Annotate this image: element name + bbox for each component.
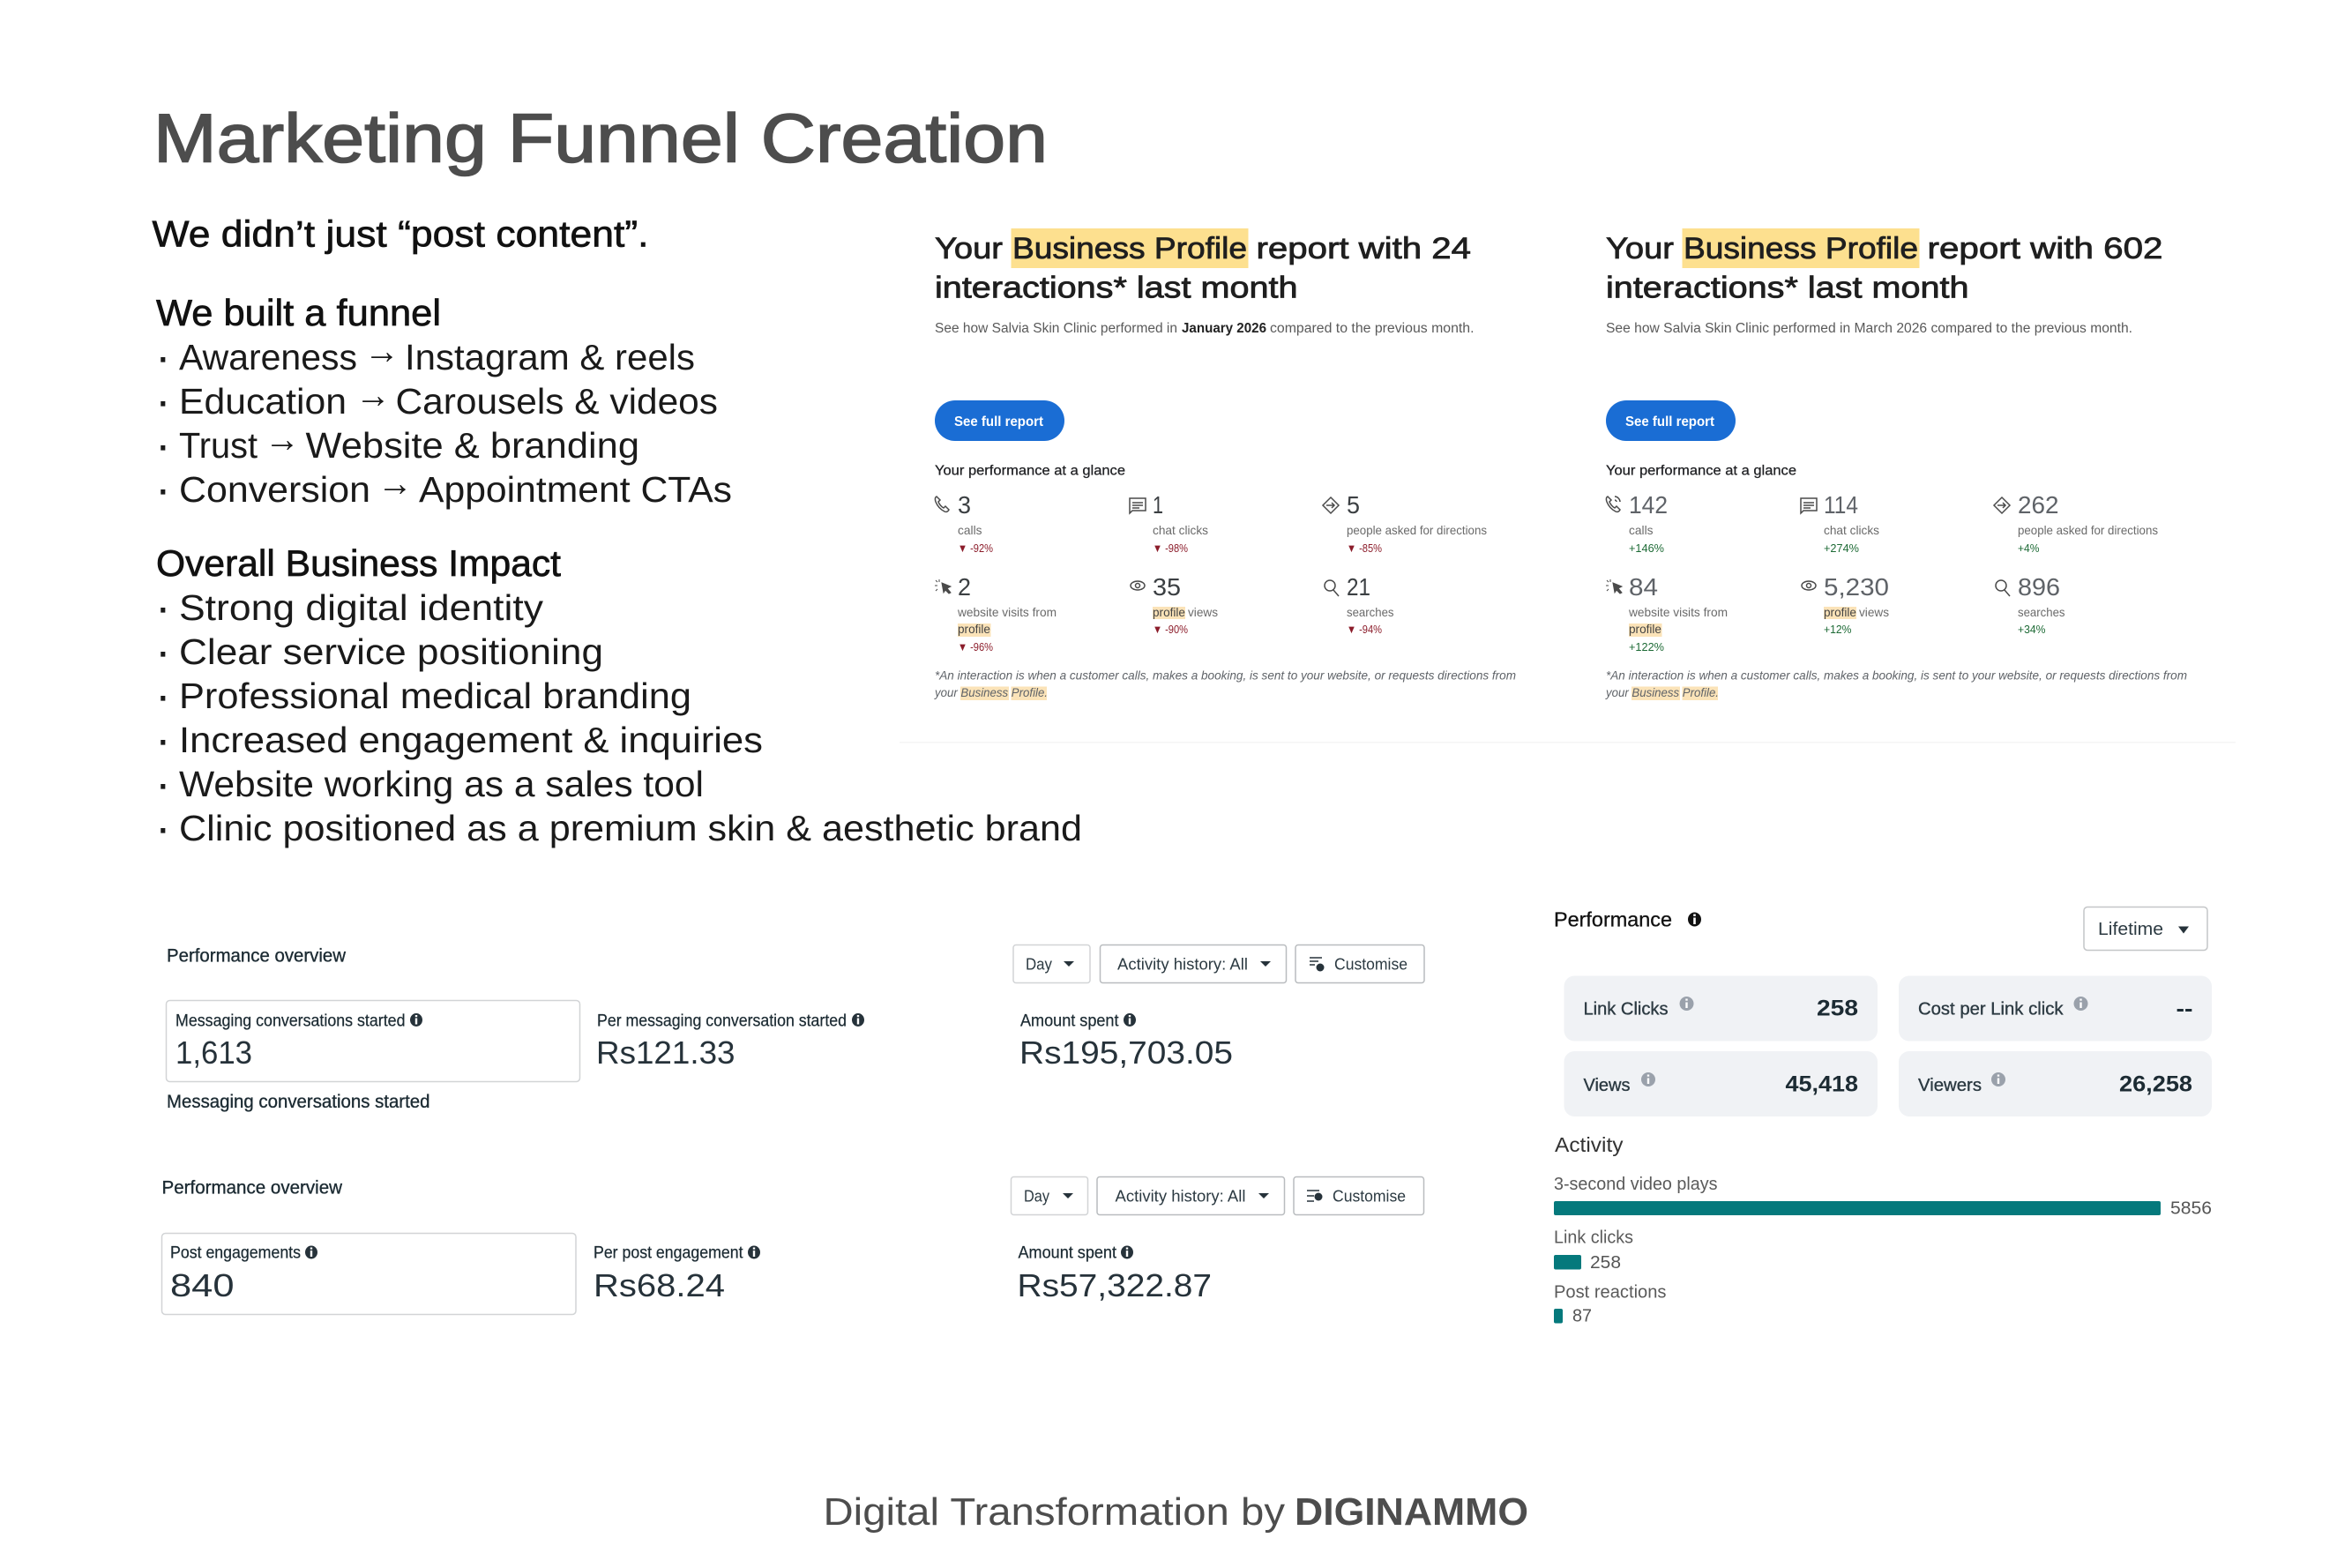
text block: overall business impact: ·: [157, 720, 169, 760]
panel: January Business Profile report: January 2026: [1182, 321, 1266, 336]
panel: January Business Profile report: 35: [1153, 573, 1181, 601]
panel: ad performance cards: --: [2177, 997, 2192, 1021]
text block: funnel list: Appointment CTAs: [419, 469, 732, 510]
text block: funnel list: Awareness: [179, 337, 357, 377]
panel: performance overview post engagement: Post engagements: [170, 1243, 301, 1263]
panel: performance overview messaging: Performance overview: [167, 945, 347, 967]
panel: performance overview messaging: Messaging conversations started: [167, 1092, 430, 1112]
panel: March Business Profile report: 84: [1629, 573, 1658, 601]
panel: March Business Profile report: profile: [1629, 622, 1661, 636]
panel: March Business Profile report: views: [1859, 605, 1889, 619]
text block: overall business impact: Clear service positioning: [179, 631, 603, 672]
panel: March Business Profile report: chat clicks: [1824, 523, 1879, 537]
panel: performance overview post engagement: Performance overview: [162, 1178, 343, 1198]
panel: March Business Profile report: 896: [2018, 573, 2060, 601]
panel: performance overview post engagement: Customise: [1333, 1187, 1406, 1205]
panel: March Business Profile report: +4%: [2018, 541, 2040, 555]
panel: January Business Profile report: 3: [958, 491, 971, 519]
panel: ad performance cards: Cost per Link click: [1918, 1000, 2065, 1019]
panel: January Business Profile report: profile: [1153, 605, 1185, 619]
footer credit: [824, 1490, 1528, 1534]
panel: performance overview messaging: Customise: [1334, 956, 1407, 974]
panel: performance overview post engagement: Rs68.24: [594, 1267, 725, 1303]
panel: January Business Profile report: profile: [958, 622, 990, 636]
panel: March Business Profile report: 114: [1824, 491, 1858, 519]
panel: January Business Profile report: ▼ -94%: [1347, 623, 1382, 636]
panel: ad performance cards: Viewers: [1918, 1076, 1982, 1095]
panel: January Business Profile report: ▼ -85%: [1347, 541, 1382, 555]
panel: ad performance cards: 45,418: [1785, 1072, 1858, 1097]
text block: funnel list: →: [364, 330, 399, 371]
text block: overall business impact: Website working as a sales tool: [179, 764, 704, 804]
panel: January Business Profile report: Business Profile: [1012, 232, 1247, 265]
panel: January Business Profile report: views: [1188, 605, 1218, 619]
panel: January Business Profile report: 21: [1347, 573, 1370, 601]
panel: March Business Profile report: Your performance at a glance: [1606, 464, 1796, 478]
panel: March Business Profile report: 262: [2018, 491, 2058, 519]
panel: January Business Profile report: calls: [958, 523, 982, 537]
text block: overall business impact: ·: [157, 808, 169, 848]
panel: March Business Profile report: *An interaction is when a customer calls, makes a booking, is sent to your website, or requests directions from: [1606, 668, 2187, 683]
panel: performance overview messaging: [166, 945, 1424, 1112]
panel: January Business Profile report: compared to the previous month.: [1270, 321, 1475, 336]
panel: performance overview messaging: Rs195,703.05: [1019, 1034, 1233, 1071]
panel: January Business Profile report: [900, 228, 1570, 743]
text block: funnel list: ·: [157, 425, 169, 466]
panel: performance overview messaging: Amount spent: [1020, 1012, 1119, 1030]
panel: performance overview messaging: 1,613: [175, 1034, 252, 1071]
panel: March Business Profile report: people asked for directions: [2018, 523, 2158, 537]
lead statement: We didn’t just “post content”.: [152, 213, 649, 254]
panel: ad performance cards: Views: [1584, 1076, 1630, 1095]
panel: performance overview messaging: Activity history: All: [1117, 956, 1248, 974]
panel: January Business Profile report: website visits from: [957, 605, 1057, 619]
panel: performance overview messaging: Per messaging conversation started: [597, 1012, 847, 1030]
text block: funnel list: →: [265, 418, 300, 459]
panel: performance overview post engagement: 840: [170, 1267, 235, 1303]
panel: January Business Profile report: 5: [1347, 491, 1360, 519]
panel: March Business Profile report: calls: [1629, 523, 1653, 537]
panel: March Business Profile report: profile: [1824, 605, 1856, 619]
panel: January Business Profile report: people asked for directions: [1347, 523, 1487, 537]
panel: March Business Profile report: Your: [1606, 232, 1674, 265]
text block: funnel list: Carousels & videos: [395, 381, 718, 422]
panel: March Business Profile report: website visits from: [1628, 605, 1728, 619]
panel: March Business Profile report: 142: [1629, 491, 1668, 519]
panel: January Business Profile report: 2: [958, 573, 971, 601]
text block: funnel list: ·: [157, 381, 169, 422]
text block: funnel list: Trust: [179, 425, 258, 466]
panel: performance overview messaging: Rs121.33: [596, 1034, 735, 1071]
panel: January Business Profile report: Your: [935, 232, 1003, 265]
text block: funnel list: →: [355, 374, 391, 415]
panel: ad performance cards: 26,258: [2119, 1072, 2192, 1097]
panel: ad performance cards: Link Clicks: [1584, 1000, 1669, 1019]
footer credit: DIGINAMMO: [1295, 1490, 1528, 1534]
panel: March Business Profile report: +12%: [1824, 623, 1852, 636]
panel: performance overview post engagement: Amount spent: [1018, 1243, 1117, 1263]
text block: overall business impact: ·: [157, 587, 169, 628]
panel: ad performance cards: Lifetime: [2098, 920, 2163, 939]
panel: March Business Profile report: your Business Profile.: [1605, 685, 1719, 699]
panel: March Business Profile report: +34%: [2018, 623, 2046, 636]
panel: March Business Profile report: See how Salvia Skin Clinic performed in March 2026 compared to the previous month.: [1606, 321, 2132, 336]
panel: ad performance cards: Performance: [1554, 908, 1672, 931]
panel: performance overview post engagement: Activity history: All: [1115, 1187, 1245, 1205]
bar chart: activity: 3-second video plays: [1554, 1175, 1718, 1194]
panel: January Business Profile report: ▼ -92%: [958, 541, 993, 555]
panel: January Business Profile report: 1: [1153, 491, 1163, 519]
bar chart: activity: 87: [1572, 1307, 1592, 1326]
panel: January Business Profile report: interactions* last month: [935, 272, 1298, 305]
panel: January Business Profile report: report with 24: [1256, 232, 1471, 265]
panel: January Business Profile report: See full report: [954, 414, 1044, 429]
panel: March Business Profile report: See full report: [1625, 414, 1715, 429]
bar chart: activity: Activity: [1555, 1133, 1624, 1156]
text block: funnel list: Conversion: [179, 469, 370, 510]
footer credit: Digital Transformation by: [824, 1490, 1285, 1534]
text block: funnel list: Instagram & reels: [405, 337, 695, 377]
panel: January Business Profile report: *An interaction is when a customer calls, makes a booking, is sent to your website, or requests directions from: [935, 668, 1516, 683]
panel: performance overview messaging: Messaging conversations started: [175, 1012, 406, 1030]
bar chart: activity: 5856: [2170, 1199, 2212, 1219]
panel: January Business Profile report: your Business Profile.: [934, 685, 1048, 699]
panel: January Business Profile report: searches: [1347, 605, 1393, 619]
panel: performance overview post engagement: Per post engagement: [594, 1243, 743, 1263]
text block: funnel list: ·: [157, 337, 169, 377]
text block: overall business impact: [156, 542, 1082, 848]
text block: funnel list: →: [377, 462, 413, 504]
bar chart: activity: 258: [1590, 1253, 1621, 1273]
panel: March Business Profile report: [1553, 228, 2236, 743]
bar chart: activity: Post reactions: [1554, 1282, 1667, 1302]
panel: performance overview post engagement: Rs57,322.87: [1018, 1267, 1212, 1303]
text block: funnel list: Education: [179, 381, 347, 422]
panel: March Business Profile report: interactions* last month: [1606, 272, 1968, 305]
text block: overall business impact: ·: [157, 764, 169, 804]
panel: January Business Profile report: See how Salvia Skin Clinic performed in: [935, 321, 1177, 336]
panel: January Business Profile report: Your performance at a glance: [935, 464, 1125, 478]
title: Marketing Funnel Creation: [153, 99, 1048, 176]
bar chart: activity: Link clicks: [1554, 1228, 1633, 1247]
text block: overall business impact: Strong digital identity: [179, 587, 544, 628]
panel: January Business Profile report: ▼ -96%: [958, 640, 993, 653]
panel: January Business Profile report: ▼ -90%: [1153, 623, 1188, 636]
text block: overall business impact: Professional medical branding: [179, 676, 691, 716]
panel: performance overview post engagement: Day: [1024, 1187, 1049, 1205]
panel: January Business Profile report: chat clicks: [1153, 523, 1208, 537]
panel: ad performance cards: 258: [1817, 997, 1858, 1021]
text block: overall business impact: Increased engagement & inquiries: [179, 720, 763, 760]
text block: funnel list: Website & branding: [305, 425, 639, 466]
panel: March Business Profile report: 5,230: [1824, 573, 1889, 601]
panel: March Business Profile report: searches: [2018, 605, 2065, 619]
text block: funnel list: ·: [157, 469, 169, 510]
panel: performance overview post engagement: [162, 1176, 1423, 1314]
text block: overall business impact: Clinic positioned as a premium skin & aesthetic brand: [179, 808, 1082, 848]
panel: March Business Profile report: +122%: [1629, 640, 1664, 653]
panel: performance overview messaging: Day: [1026, 956, 1052, 974]
panel: March Business Profile report: Business Profile: [1684, 232, 1918, 265]
text block: overall business impact: ·: [157, 676, 169, 716]
panel: March Business Profile report: report with 602: [1928, 232, 2162, 265]
text block: funnel list: We built a funnel: [156, 292, 441, 333]
panel: January Business Profile report: ▼ -98%: [1153, 541, 1188, 555]
panel: March Business Profile report: +274%: [1824, 541, 1859, 555]
panel: ad performance cards: [1554, 907, 2212, 1116]
panel: March Business Profile report: +146%: [1629, 541, 1664, 555]
text block: funnel list: [156, 292, 732, 510]
text block: overall business impact: ·: [157, 631, 169, 672]
text block: overall business impact: Overall Business Impact: [156, 542, 561, 584]
bar chart: activity: [1554, 1133, 2212, 1326]
